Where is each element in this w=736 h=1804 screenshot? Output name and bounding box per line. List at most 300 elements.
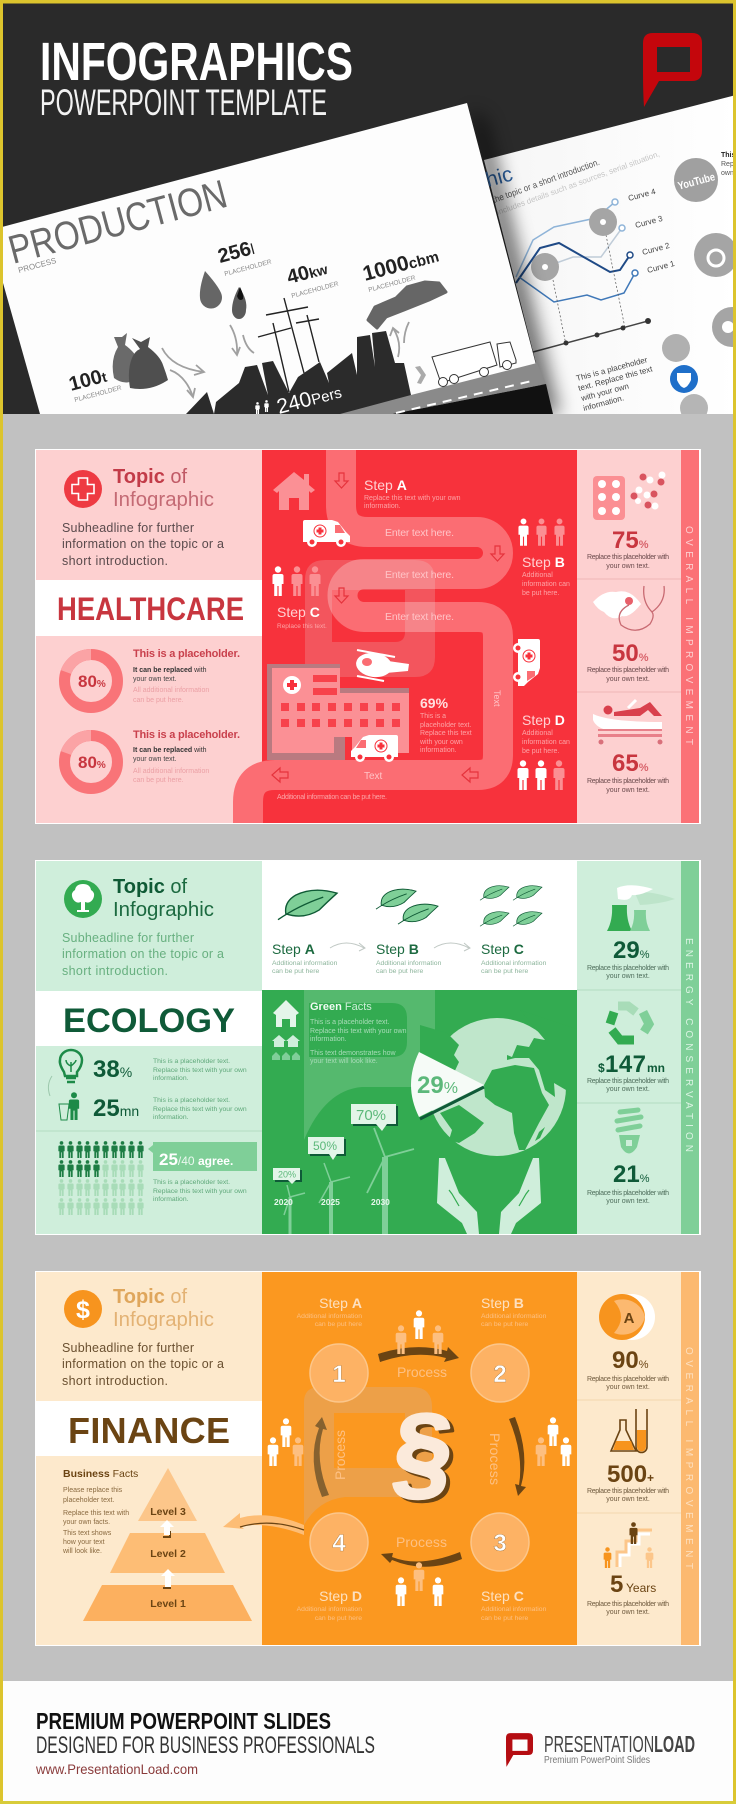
right column [577, 861, 681, 1234]
stat 69 percent: information. [420, 747, 457, 754]
icon: cross badge [64, 470, 102, 508]
watermark logo [304, 1387, 432, 1525]
step A: Replace this text with your own [364, 495, 461, 502]
subheadline: Subheadline for further [62, 521, 194, 535]
panel: finance [35, 1271, 701, 1646]
pie slice: 29 percent [411, 1052, 484, 1119]
placeholder text second: This is a placeholder. [133, 729, 240, 741]
stat 21: your own text. [606, 1198, 650, 1205]
stat 147 million: $ [598, 1061, 605, 1075]
callouts: yearly values: 50% [313, 1139, 337, 1153]
icon: patient in bed [593, 700, 662, 744]
watermark logo [304, 990, 435, 1140]
icon: dollar badge: $ [76, 1296, 90, 1324]
stat 65: 65% [612, 750, 649, 777]
stat 50 [587, 640, 669, 683]
icon: pills [593, 472, 666, 520]
icon: career steps [604, 1522, 653, 1568]
step A: Step A [272, 941, 315, 957]
road labels [385, 527, 454, 623]
slide shadow [470, 110, 560, 414]
placeholder text: All additional information [133, 687, 209, 694]
callout description [153, 1179, 247, 1203]
step numbers: 2 [493, 1361, 507, 1388]
brand tagline: Premium PowerPoint Slides [544, 1754, 650, 1766]
heading: Topic of [113, 466, 188, 488]
stat 75: 75% [612, 527, 649, 554]
business facts [62, 1468, 138, 1555]
icon: recycling person [48, 1076, 79, 1120]
icon: bulb [60, 1050, 82, 1082]
right column [577, 1272, 681, 1645]
step C people [272, 566, 320, 596]
business facts: Business Facts [63, 1468, 138, 1480]
stat 147 million: 147 [605, 1051, 646, 1078]
healthcare banner [36, 580, 262, 636]
icon: hospital [267, 664, 409, 760]
step numbers [332, 1361, 507, 1557]
step C: Replace this text. [277, 623, 327, 630]
stat 69 percent: This is a [420, 713, 446, 720]
slide placeholder text: with your own [579, 382, 630, 403]
subheadline: short introduction. [62, 554, 168, 568]
icon: ambulance top [303, 520, 350, 547]
slide placeholder text [575, 355, 654, 413]
icon: two leaves [376, 889, 438, 924]
stat 147 million: Replace this placeholder with [587, 1078, 669, 1085]
step A: can be put here [272, 968, 319, 975]
header band [0, 0, 736, 422]
step B: be put here. [522, 590, 559, 597]
stat 25 minutes: This is a placeholder text. [153, 1097, 230, 1104]
donut: 80 percent second: 80% [78, 753, 106, 772]
stat 50: your own text. [606, 676, 650, 683]
green facts text: Replace this text with your own [310, 1028, 407, 1035]
side strip [681, 450, 699, 823]
step labels left: Additional information [297, 1313, 362, 1320]
subheadline: information on the topic or a [62, 1357, 224, 1371]
main production slide preview: PROCESS [17, 256, 57, 275]
social icons [662, 152, 736, 422]
right column [577, 450, 681, 823]
side strip [681, 1272, 699, 1645]
placeholder text second: can be put here. [133, 777, 184, 784]
step labels left: Additional information [297, 1606, 362, 1613]
ecology banner: ECOLOGY [63, 1002, 235, 1040]
icon: globe [420, 1010, 580, 1156]
year axis labels [274, 1197, 390, 1207]
panel: ecology [35, 860, 701, 1235]
stat 38 percent: information. [153, 1075, 189, 1082]
stat 75: your own text. [606, 563, 650, 570]
stat 65: your own text. [606, 787, 650, 794]
callouts: yearly values: 70% [356, 1107, 386, 1124]
stat 25 minutes: 25mn [93, 1095, 139, 1122]
finance banner [36, 1401, 262, 1456]
process circles [310, 1344, 529, 1571]
footer headline: PREMIUM POWERPOINT SLIDES [36, 1708, 331, 1734]
stat 75: Replace this placeholder with [587, 554, 669, 561]
slide heading fragment: hic [483, 163, 515, 192]
finance banner: FINANCE [68, 1410, 230, 1451]
arrows up [160, 1520, 175, 1588]
process labels: Process [332, 1430, 348, 1480]
stat 90 [587, 1347, 669, 1391]
step labels right: Step C [481, 1588, 524, 1604]
stat 5 years: Replace this placeholder with [587, 1601, 669, 1608]
green facts text: your text will look like. [310, 1058, 378, 1065]
icon: bags [113, 333, 136, 382]
stat 69 percent: Replace this text [420, 730, 472, 737]
step labels left: Step A [319, 1295, 362, 1311]
level 3 [138, 1468, 197, 1521]
heading: Infographic [113, 1309, 214, 1331]
step B: Additional information [376, 960, 442, 967]
step labels right: Additional information [481, 1313, 547, 1320]
stat 90: 90% [612, 1347, 649, 1374]
subheadline: information on the topic or a [62, 537, 224, 551]
icon: truck [432, 342, 516, 386]
footer subline: DESIGNED FOR BUSINESS PROFESSIONALS [36, 1732, 375, 1759]
heading: Infographic [113, 489, 214, 511]
business facts: your own facts. [63, 1519, 110, 1526]
step B [522, 554, 570, 597]
step C: Step C [277, 604, 320, 620]
donut: 80 percent: 80% [78, 672, 106, 691]
centre process cycle [262, 1272, 577, 1645]
icon: grade A badge: A [624, 1310, 635, 1327]
callout: 25/40 agree: 25/40 agree. [159, 1150, 233, 1169]
stat 38 percent: This is a placeholder text. [153, 1058, 230, 1065]
icon: recycle [610, 1006, 649, 1040]
icon: tree badge [64, 880, 102, 918]
stat 90: your own text. [606, 1384, 650, 1391]
level 3: Level 3 [150, 1506, 186, 1518]
arrow [434, 943, 470, 951]
stat 147 million: your own text. [606, 1086, 650, 1093]
step D [522, 712, 570, 755]
stat 5 years: your own text. [606, 1609, 650, 1616]
green facts text [310, 1001, 407, 1065]
stat 25 minutes: information. [153, 1114, 189, 1121]
green facts text: information. [310, 1036, 347, 1043]
process labels: Process [397, 1364, 447, 1380]
healthcare banner: HEALTHCARE [57, 591, 244, 627]
icon: dollar badge [64, 1290, 102, 1328]
subheadline [62, 931, 224, 978]
stat 29: Replace this placeholder with [587, 965, 669, 972]
curve labels: Curve 4 [627, 187, 657, 203]
stat 25 minutes [93, 1095, 247, 1122]
step labels right: can be put here [481, 1321, 528, 1328]
stat 69 percent: with your own [419, 739, 463, 746]
business facts: will look like. [62, 1548, 102, 1555]
main production slide preview: PLACEHOLDER [224, 259, 273, 278]
stat 5 years: Years [626, 1581, 656, 1595]
step labels left: can be put here [315, 1615, 362, 1622]
heading: Infographic [113, 899, 214, 921]
step A [364, 477, 461, 510]
subheadline: short introduction. [62, 964, 168, 978]
step numbers: 4 [332, 1530, 346, 1557]
business facts: This text shows [63, 1530, 112, 1537]
step B people [518, 519, 565, 546]
placeholder text: This is a placeholder. [133, 648, 240, 660]
heading [113, 1286, 214, 1331]
year axis labels: 2020 [274, 1197, 293, 1207]
top steps band [262, 861, 577, 991]
watermark logo [305, 560, 435, 720]
icon: hands [437, 1158, 541, 1234]
green facts text: Green Facts [310, 1001, 372, 1013]
stat 500+: 500+ [607, 1461, 654, 1488]
step A: Step A [364, 477, 407, 493]
stat 90: Replace this placeholder with [587, 1376, 669, 1383]
step labels left: Step D [319, 1588, 362, 1604]
step D people [518, 760, 564, 790]
callout description: Replace this text with your own [153, 1188, 247, 1195]
placeholder text second: your own text. [133, 756, 177, 763]
stat 5 years [587, 1571, 669, 1616]
icon: footer logo [506, 1733, 533, 1767]
main production slide preview: PLACEHOLDER [368, 275, 417, 294]
year axis labels: 2025 [321, 1197, 340, 1207]
step C: can be put here [481, 968, 528, 975]
centre process road [248, 450, 577, 823]
production heading: PRODUCTION [4, 172, 232, 273]
section sign: § [389, 1393, 457, 1510]
pie slice: 29 percent: 29% [417, 1072, 458, 1099]
icon: flask and tube [611, 1409, 647, 1452]
chevron [415, 366, 426, 384]
title: INFOGRAPHICS [40, 32, 353, 92]
business facts: placeholder text. [63, 1497, 114, 1504]
level 2: Level 2 [150, 1548, 186, 1560]
step labels right [481, 1295, 547, 1622]
level 1: Level 1 [150, 1598, 186, 1610]
subheadline: Subheadline for further [62, 931, 194, 945]
stat 29: 29% [613, 937, 650, 964]
section sign: § [393, 1396, 461, 1513]
icon: cloud [368, 282, 446, 328]
stat 5 years: 5 [610, 1571, 623, 1598]
stat 75 [587, 527, 669, 570]
arrows on road [272, 473, 504, 782]
step labels left [297, 1295, 362, 1622]
stat 50: 50% [612, 640, 649, 667]
callouts: yearly values: 20% [278, 1170, 296, 1180]
values: 40kw [285, 257, 330, 289]
placeholder text second: All additional information [133, 768, 209, 775]
icon: house [273, 472, 315, 510]
step A: Additional information [272, 960, 338, 967]
icon: four leaves [480, 886, 542, 926]
icon: grade A badge [599, 1294, 655, 1340]
stat 29: your own text. [606, 973, 650, 980]
step B [376, 941, 442, 975]
stat 69 percent [419, 695, 472, 754]
step labels right: Step B [481, 1295, 524, 1311]
placeholder text second: It can be replaced with [133, 747, 207, 754]
arrows [162, 322, 409, 397]
icon: one leaf [278, 890, 337, 920]
icon: drops [200, 271, 222, 309]
level 2 [110, 1533, 225, 1573]
subheadline: information on the topic or a [62, 947, 224, 961]
brand name: PRESENTATIONLOAD [544, 1731, 695, 1757]
step labels right: can be put here [481, 1615, 528, 1622]
stat 500+: Replace this placeholder with [587, 1488, 669, 1495]
heading: Topic of [113, 1286, 188, 1308]
arrow back to pyramid [223, 1513, 304, 1535]
stat 38 percent [93, 1056, 247, 1083]
footer [0, 1681, 736, 1801]
stat 21: 21% [613, 1161, 650, 1188]
stat 38 percent: 38% [93, 1056, 132, 1083]
icon: red logo [643, 33, 702, 107]
subheadline [62, 1341, 224, 1388]
road labels: Enter text here. [385, 569, 454, 581]
stat 38 percent: Replace this text with your own [153, 1067, 247, 1074]
slide placeholder text: information. [582, 393, 625, 413]
green facts area [262, 990, 580, 1234]
second slide preview: includes details such as sources, serial situation, [496, 149, 661, 217]
step C [277, 604, 327, 630]
workforce label [255, 390, 342, 414]
step numbers: 3 [493, 1530, 507, 1557]
step D: Step D [522, 712, 565, 728]
line chart curves [516, 199, 648, 352]
donut: 80 percent second [64, 735, 118, 788]
step B: Step B [376, 941, 419, 957]
curve labels: Curve 3 [634, 214, 664, 230]
centre process road: Text [492, 690, 502, 707]
step B: information can [522, 581, 570, 588]
values: 1000cbm [360, 244, 441, 286]
main production slide preview [2, 103, 553, 419]
step labels right: Additional information [481, 1606, 547, 1613]
second slide preview: the topic or a short introduction. [491, 157, 601, 205]
curve labels: Curve 2 [641, 241, 671, 257]
step A: information. [364, 503, 401, 510]
business facts: Please replace this [63, 1487, 123, 1494]
stat 65 [587, 750, 669, 794]
pyramid [83, 1468, 252, 1621]
icon: helicopter [355, 650, 409, 681]
centre process road: Text [364, 771, 383, 782]
stat 21 [587, 1161, 669, 1205]
power poles [258, 298, 319, 392]
heading: Topic of [113, 876, 188, 898]
side strip: OVERALL IMPROVEMENT [683, 1347, 694, 1569]
icon: ambulance right [513, 639, 540, 686]
donut: 80 percent [64, 654, 118, 708]
slide placeholder text: text. Replace this text [577, 364, 654, 393]
step B: Step B [522, 554, 565, 570]
curve labels [627, 187, 676, 275]
placeholder text: your own text. [133, 676, 177, 683]
step A [272, 941, 338, 975]
stat 69 percent: placeholder text. [420, 722, 471, 729]
social icons: Rep [721, 161, 734, 168]
level 1 [83, 1585, 252, 1621]
heading [113, 876, 214, 921]
second slide preview [483, 95, 736, 422]
process labels: Process [487, 1433, 503, 1485]
stat 65: Replace this placeholder with [587, 778, 669, 785]
main production slide preview: PLACEHOLDER [291, 281, 340, 300]
green facts text: This text demonstrates how [310, 1050, 397, 1057]
values: 100t [67, 365, 109, 396]
stat 21: Replace this placeholder with [587, 1190, 669, 1197]
subheadline: short introduction. [62, 1374, 168, 1388]
people grid: 25 of 40 [58, 1141, 144, 1215]
placeholder text: It can be replaced with [133, 667, 207, 674]
stat 69 percent: 69% [420, 695, 449, 711]
stat 29 [587, 937, 669, 980]
side strip: ENERGY CONSERVATION [683, 938, 694, 1152]
process labels [332, 1364, 503, 1550]
step B: Additional [522, 572, 553, 579]
social icons: YouTube [677, 171, 716, 193]
callout: 25/40 agree [148, 1142, 257, 1171]
left column [36, 1272, 262, 1645]
icon: houses [272, 1000, 300, 1060]
arrow [330, 943, 365, 951]
process labels: Process [396, 1534, 447, 1550]
placeholder text: can be put here. [133, 697, 184, 704]
stat 500+ [587, 1461, 669, 1503]
wind turbines [284, 1128, 414, 1234]
callout description: This is a placeholder text. [153, 1179, 230, 1186]
placeholder text [133, 648, 240, 704]
subheadline: Subheadline for further [62, 1341, 194, 1355]
placeholder text second [133, 729, 240, 784]
side strip [681, 861, 699, 1234]
road labels: Enter text here. [385, 527, 454, 539]
social icons: This [721, 152, 735, 159]
road path [248, 450, 498, 823]
icon: cooling towers [607, 885, 675, 931]
curve labels: Curve 1 [646, 259, 676, 275]
step numbers: 1 [332, 1361, 346, 1388]
panel: healthcare [35, 449, 701, 824]
stat 50: Replace this placeholder with [587, 667, 669, 674]
road [340, 363, 546, 414]
people groups [268, 1310, 571, 1606]
heading [113, 466, 214, 511]
website: www.PresentationLoad.com [35, 1761, 198, 1777]
left column [36, 450, 262, 823]
stat 25 minutes: Replace this text with your own [153, 1106, 247, 1113]
values [67, 237, 441, 396]
step D: Additional [522, 730, 553, 737]
business facts: how your text [63, 1539, 105, 1546]
side strip: OVERALL IMPROVEMENT [683, 526, 694, 745]
subheadline [62, 521, 224, 568]
step labels left: can be put here [315, 1321, 362, 1328]
process arrows [314, 1347, 526, 1567]
step C: Step C [481, 941, 524, 957]
stat 147 million [587, 1051, 669, 1093]
step C [481, 941, 547, 975]
main production slide preview: PLACEHOLDER [74, 385, 123, 404]
step C: Additional information [481, 960, 547, 967]
road labels: Enter text here. [385, 611, 454, 623]
bottom note: Additional information can be put here. [277, 794, 387, 801]
step B: can be put here [376, 968, 423, 975]
business facts: Replace this text with [63, 1510, 129, 1517]
